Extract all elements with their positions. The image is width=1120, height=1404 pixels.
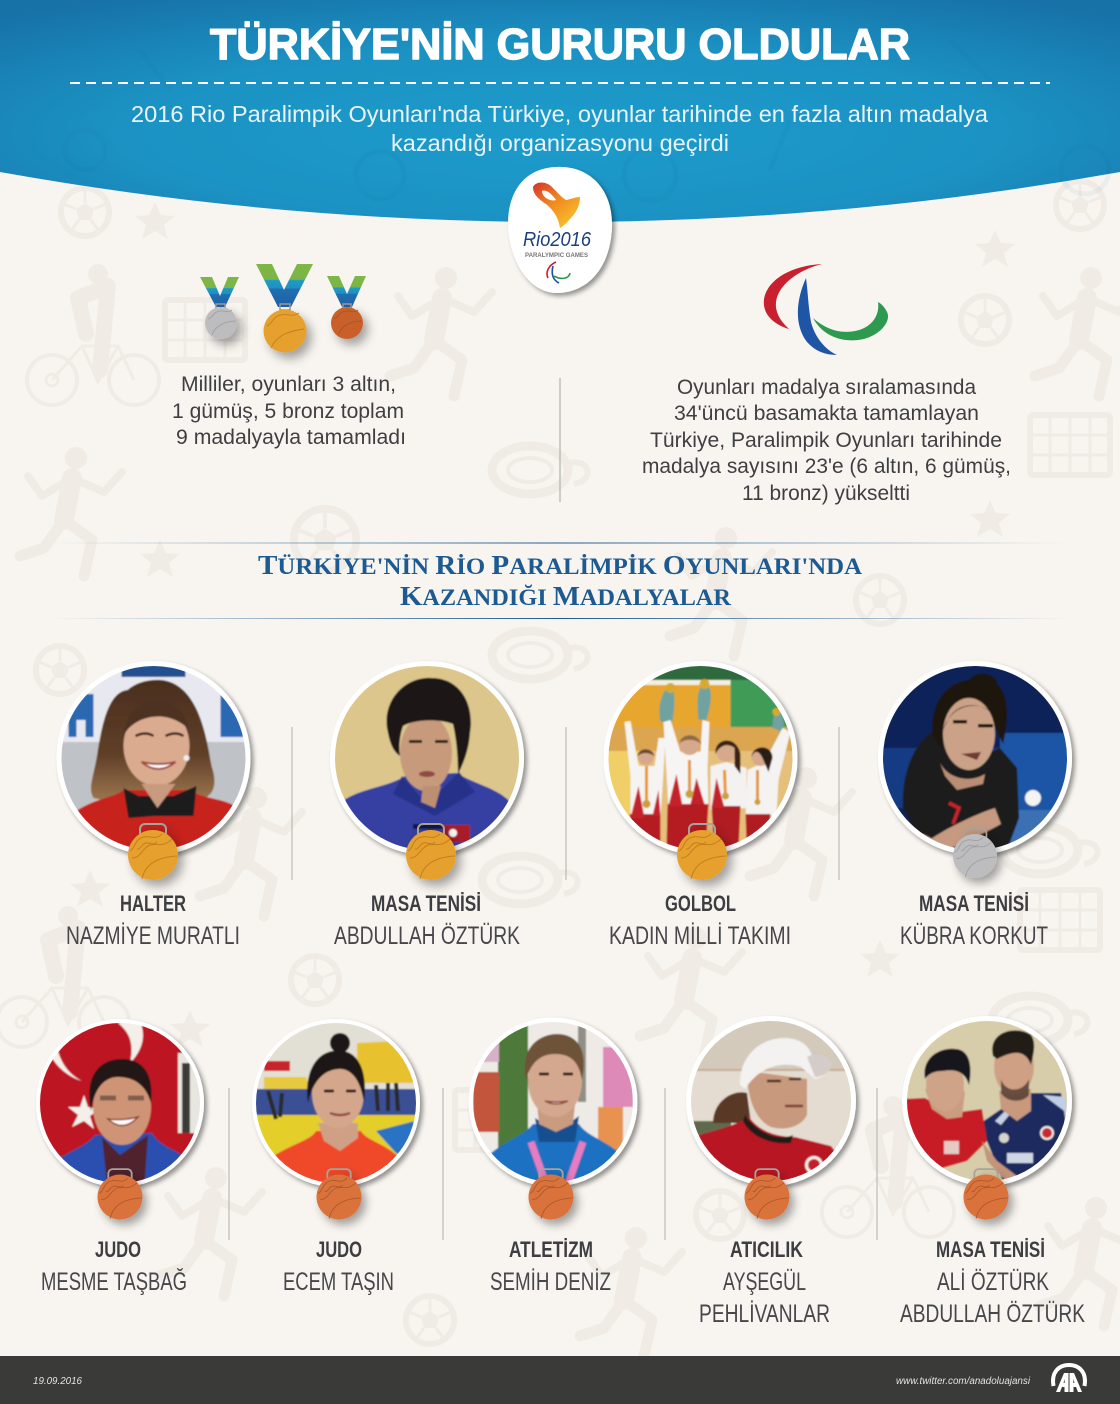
- flame emblem: [533, 182, 580, 228]
- left summary text: 9 madalyayla tamamladı: [176, 426, 406, 449]
- medal: [128, 824, 178, 880]
- labels: JUDO: [316, 1237, 362, 1262]
- gold medal: [256, 264, 313, 352]
- athlete: Kübra Korkut: [875, 658, 1080, 950]
- Paralympic agitos: [764, 264, 888, 355]
- labels: ECEM TAŞIN: [283, 1268, 394, 1296]
- subtitle: 2016 Rio Paralimpik Oyunları'nda Türkiye, oyunlar tarihinde en fazla altın madalya: [131, 101, 988, 127]
- athlete: Semih Deniz: [463, 1012, 643, 1296]
- figure A: [624, 721, 666, 816]
- medal: [964, 1169, 1008, 1220]
- section heading: KAZANDIĞI MADALYALAR: [400, 581, 731, 611]
- athlete: Ayşegül Pehlivanlar: [681, 1011, 861, 1328]
- figure C: [710, 762, 746, 810]
- athlete: Kadın Milli Takımı: [600, 658, 800, 950]
- medal: [98, 1169, 142, 1220]
- twitter link: www.twitter.com/anadoluajansi: [896, 1376, 1031, 1387]
- three medals illustration: [200, 264, 366, 352]
- header watermarks: [65, 30, 1109, 201]
- portrait frame and photo: [681, 1011, 861, 1196]
- labels: PEHLİVANLAR: [699, 1299, 830, 1328]
- center divider: [559, 378, 561, 502]
- left summary text: 1 gümüş, 5 bronz toplam: [172, 400, 404, 423]
- Rio 2016 wordmark: Rio2016: [523, 229, 592, 251]
- figure D: [746, 728, 790, 816]
- footer bar: [0, 1356, 1120, 1404]
- header banner: [0, 0, 1120, 222]
- figure B: [664, 720, 710, 808]
- section rules: [50, 542, 1070, 619]
- silver medal: [200, 277, 239, 339]
- portrait frame and photo: [875, 658, 1080, 862]
- medal: [953, 829, 997, 878]
- portrait frame and photo: [36, 1019, 210, 1190]
- medal: [528, 1169, 574, 1220]
- portrait frame and photo: [54, 658, 254, 858]
- labels: MASA TENİSİ: [919, 891, 1029, 916]
- labels: [609, 891, 791, 950]
- column dividers: [229, 727, 877, 1240]
- portrait frame and photo: [600, 658, 800, 858]
- labels: NAZMİYE MURATLI: [66, 921, 240, 950]
- labels: ATLETİZM: [509, 1237, 593, 1262]
- left summary text: [172, 373, 406, 449]
- labels: HALTER: [120, 891, 186, 916]
- right summary text: madalya sayısını 23'e (6 altın, 6 gümüş,: [642, 455, 1011, 478]
- right summary text: [642, 376, 1011, 505]
- bronze medal: [327, 276, 366, 339]
- labels: ATICILIK: [730, 1237, 803, 1262]
- trophies: [659, 684, 784, 732]
- labels: MASA TENİSİ: [936, 1237, 1045, 1262]
- labels: [66, 891, 240, 950]
- labels: MESME TAŞBAĞ: [41, 1267, 187, 1296]
- subtitle: kazandığı organizasyonu geçirdi: [391, 130, 729, 156]
- labels: [41, 1237, 187, 1296]
- labels: GOLBOL: [665, 891, 736, 916]
- right summary text: Türkiye, Paralimpik Oyunları tarihinde: [650, 429, 1002, 452]
- labels: ABDULLAH ÖZTÜRK: [334, 922, 520, 950]
- Rio 2016 Paralympic logo: [508, 167, 612, 293]
- labels: MASA TENİSİ: [371, 891, 481, 916]
- Paralympic Games caption: PARALYMPIC GAMES: [525, 253, 588, 259]
- dashed divider: [70, 82, 1050, 84]
- right summary text: 11 bronz) yükseltti: [742, 482, 910, 505]
- portrait frame and photo: [252, 1019, 426, 1190]
- athlete: Nazmiye Muratlı: [54, 658, 254, 950]
- left summary text: Milliler, oyunları 3 altın,: [181, 373, 396, 396]
- medal: [677, 824, 727, 880]
- labels: KÜBRA KORKUT: [900, 922, 1048, 950]
- section heading: [258, 550, 862, 611]
- mini agitos: [547, 262, 570, 283]
- right summary text: 34'üncü basamakta tamamlayan: [674, 402, 979, 425]
- icon: Anadolu Agency logo: [1053, 1365, 1085, 1392]
- athlete: Mesme Taşbağ: [30, 1013, 210, 1296]
- portrait frame and photo: [468, 1018, 644, 1190]
- title: TÜRKİYE'NİN GURURU OLDULAR: [210, 20, 910, 69]
- date: 19.09.2016: [33, 1376, 82, 1387]
- portrait frame and photo: [327, 658, 527, 858]
- medal: [316, 1169, 362, 1220]
- labels: ALİ ÖZTÜRK: [937, 1267, 1049, 1296]
- athlete: Ecem Taşın: [246, 1013, 426, 1296]
- medal: [406, 824, 456, 880]
- labels: [490, 1237, 611, 1296]
- labels: [334, 891, 520, 950]
- athlete: Ali Öztürk and Abdullah Öztürk: [897, 1011, 1085, 1328]
- labels: SEMİH DENİZ: [490, 1267, 611, 1296]
- labels: [900, 1237, 1085, 1328]
- section heading: TÜRKİYE'NİN RİO PARALİMPİK OYUNLARI'NDA: [258, 550, 862, 580]
- medal: [744, 1169, 790, 1220]
- portrait frame and photo: [897, 1011, 1077, 1191]
- subtitle: [131, 101, 988, 156]
- labels: [283, 1237, 394, 1296]
- labels: [900, 891, 1048, 950]
- right summary text: Oyunları madalya sıralamasında: [677, 376, 976, 399]
- athlete: Abdullah Öztürk: [327, 658, 527, 950]
- labels: JUDO: [95, 1237, 141, 1262]
- labels: [699, 1237, 830, 1328]
- labels: AYŞEGÜL: [723, 1268, 806, 1296]
- labels: KADIN MİLLİ TAKIMI: [609, 921, 791, 950]
